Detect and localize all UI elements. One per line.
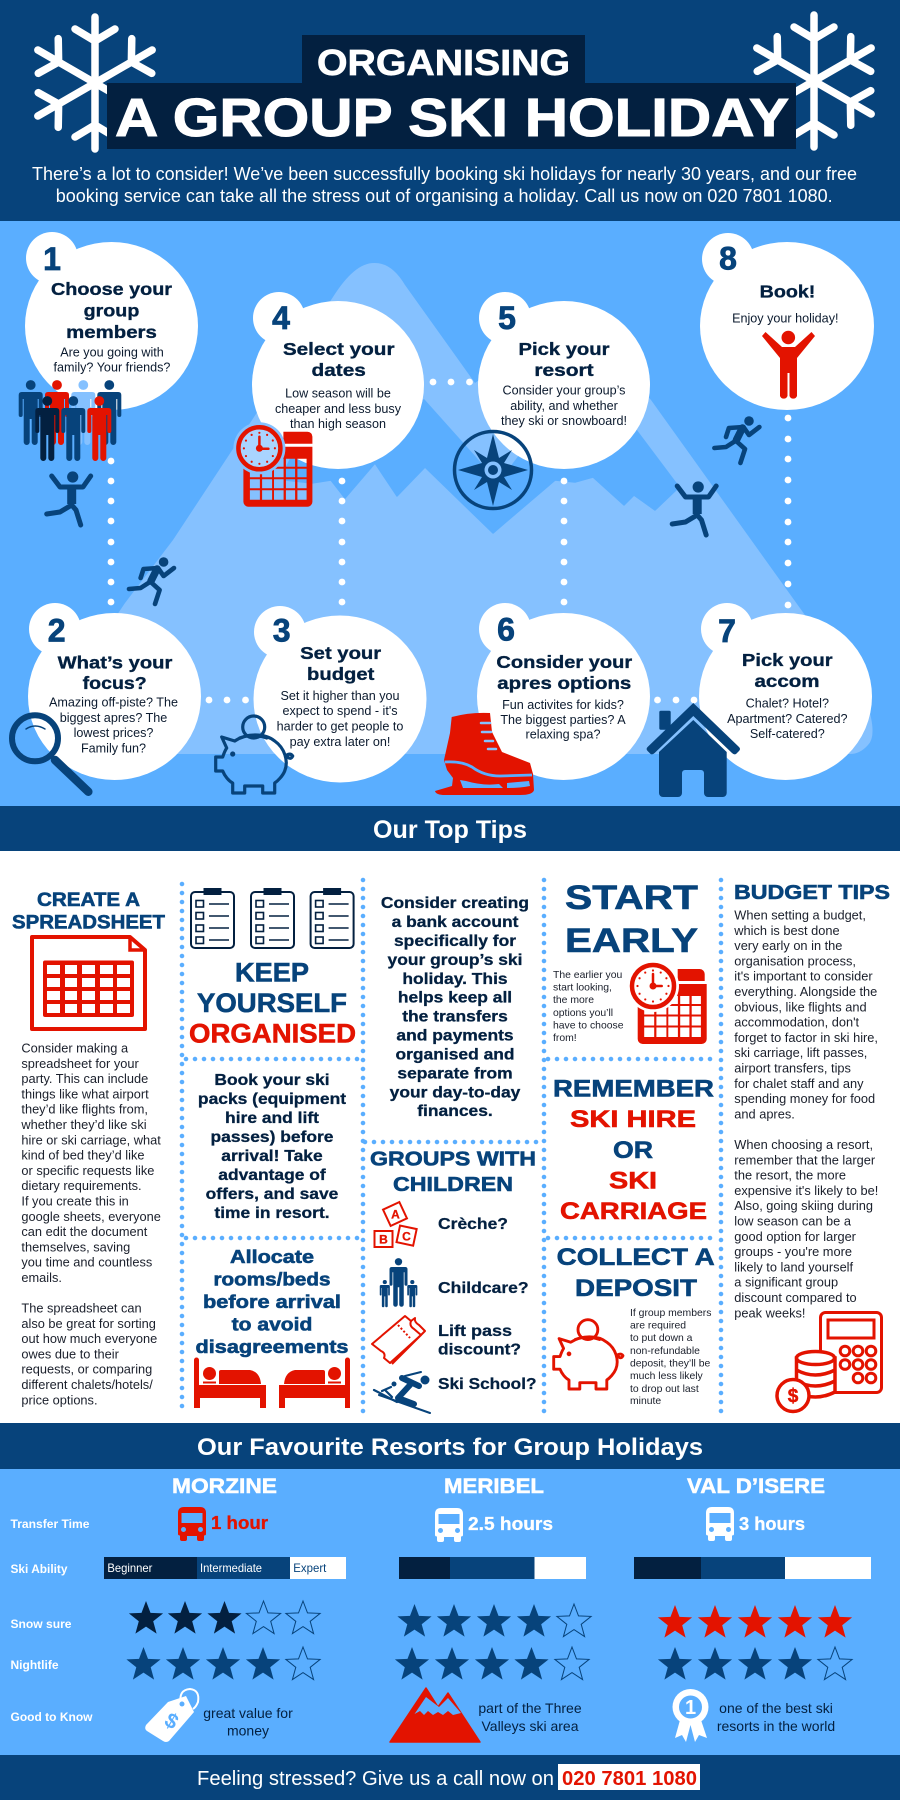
tip: collect a deposit: minute (630, 1396, 661, 1407)
intro text (32, 163, 857, 206)
step 3 bubble: pay extra later on! (290, 735, 390, 749)
tip: collect a deposit: COLLECT A (557, 1244, 715, 1271)
icon: white bus (706, 1507, 734, 1541)
step 8 bubble: 8 (719, 240, 737, 276)
step 4 bubble: dates (312, 360, 366, 380)
icon: red mountain (390, 1688, 480, 1742)
step 4 bubble: Select your (283, 339, 395, 359)
column: Val d'Isere: VAL D’ISERE (687, 1475, 825, 1498)
step 2 bubble: Family fun? (81, 742, 146, 756)
icon: price tag (145, 1689, 198, 1742)
step 1 bubble: Choose your (51, 279, 172, 299)
tip: book ski packs: advantage of (218, 1166, 326, 1184)
tip: budget tips: very early on in the (734, 938, 842, 953)
tip: budget tips (733, 882, 890, 1412)
tip: budget tips: airport transfers, tips (734, 1060, 851, 1076)
icon: white bus (435, 1508, 463, 1542)
step 6 bubble: The biggest parties? A (500, 713, 626, 727)
icon: alphabet blocks: C (402, 1230, 411, 1244)
tip: create a spreadsheet: CREATE A (37, 889, 140, 911)
step 4 bubble: cheaper and less busy (275, 402, 402, 416)
step 6 bubble: 6 (497, 612, 515, 648)
icon: magnifying glass (12, 715, 88, 792)
column: Meribel: part of the Three (478, 1700, 582, 1716)
snow sure stars (129, 1601, 320, 1634)
icon: compass (454, 432, 532, 508)
icon: skiers (374, 1372, 430, 1413)
icon: clipboards (191, 888, 354, 948)
tip: budget tips: BUDGET TIPS (734, 882, 890, 904)
step 3 bubble: budget (307, 664, 375, 684)
step 3 bubble: expect to spend - it's (282, 704, 398, 718)
step 2 bubble: focus? (83, 673, 147, 693)
header panel (0, 0, 900, 221)
icon: coins (777, 1352, 835, 1412)
icon: group of people (19, 380, 121, 461)
step 7 bubble: accom (754, 671, 820, 691)
row labels: Ski Ability (10, 1562, 68, 1576)
tip: collect a deposit: much less likely (630, 1371, 704, 1382)
spreadsheet text: google sheets, everyone (21, 1209, 161, 1224)
step 3 bubble (254, 606, 426, 782)
section heading: favourite resorts: Our Favourite Resorts for Group Holidays (197, 1434, 703, 1461)
spreadsheet text: things like what airport (21, 1086, 149, 1101)
step 7 bubble: 7 (718, 613, 736, 649)
tip: start early: the more (553, 995, 594, 1006)
step 7 bubble: Apartment? Catered? (727, 712, 848, 726)
tip: budget tips: accommodation, don't (734, 1015, 860, 1030)
tip: start early: The earlier you (553, 970, 623, 981)
spreadsheet text: different chalets/hotels/ (21, 1377, 153, 1392)
step 7 bubble: Pick your (742, 650, 833, 670)
tip: keep yourself organised: KEEP (235, 958, 309, 988)
step 2 bubble: Amazing off-piste? The (49, 696, 178, 710)
spreadsheet text: they’d like flights from, (21, 1102, 148, 1117)
intro text: booking service can take all the stress out of organising a holiday. Call us now on 020 7801 1080. (56, 185, 833, 206)
spreadsheet text: whether they’d like ski (20, 1117, 147, 1132)
tip: collect a deposit: are required (630, 1320, 686, 1332)
tip: keep yourself organised (189, 888, 356, 1049)
spreadsheet text: price options. (21, 1392, 98, 1407)
tip: bank account: organised and (395, 1045, 515, 1063)
tip: book ski packs (198, 1071, 347, 1222)
step 1 bubble: Are you going with (60, 346, 164, 360)
panel: top tips (0, 851, 900, 1423)
nightlife stars (395, 1647, 589, 1680)
step 5 bubble: resort (534, 360, 594, 380)
tip: budget tips: which is best done (733, 923, 840, 938)
spreadsheet text: you time and countless (21, 1255, 152, 1270)
tip: collect a deposit (554, 1244, 715, 1407)
spreadsheet text: out how much everyone (21, 1331, 157, 1346)
spreadsheet text: The spreadsheet can (21, 1300, 142, 1316)
tip: start early: start looking, (553, 983, 612, 994)
column: Morzine: MORZINE (172, 1475, 277, 1498)
icon: alphabet blocks: B (379, 1232, 388, 1246)
icon: red bus (178, 1507, 206, 1541)
column: Meribel: 2.5 hours (468, 1514, 553, 1534)
tip: budget tips: likely to land yourself (734, 1259, 854, 1274)
tip: start early: from! (553, 1033, 577, 1044)
tip: start early: have to choose (553, 1020, 624, 1032)
nightlife stars (658, 1647, 852, 1680)
tip: remember ski hire or carriage (553, 1076, 714, 1225)
step 8 bubble: Enjoy your holiday! (732, 311, 839, 325)
icon: house (647, 703, 740, 797)
tip: budget tips: everything. Alongside the (734, 984, 877, 999)
spreadsheet text: emails. (21, 1270, 62, 1285)
column: Val d'Isere: resorts in the world (717, 1718, 835, 1734)
icon: rosette: 1 (685, 1697, 696, 1719)
step 6 bubble (477, 603, 650, 780)
step 5 bubble: Consider your group’s (503, 383, 625, 397)
tip: allocate rooms (194, 1246, 350, 1408)
icon: jumping figure right (672, 481, 716, 535)
icon: alphabet blocks (374, 1202, 417, 1247)
icon: snowflake right (747, 15, 881, 147)
title (107, 35, 796, 149)
tip: collect a deposit: DEPOSIT (575, 1275, 697, 1302)
tip: budget tips: ski carriage, lift passes, (734, 1045, 867, 1060)
spreadsheet text: kind of bed they’d like (21, 1148, 144, 1163)
ski ability bar: Intermediate (200, 1561, 262, 1575)
tip: keep yourself organised: YOURSELF (197, 988, 347, 1018)
icon: snowflake left (28, 17, 162, 149)
tip: bank account: specifically for (394, 932, 517, 950)
tip: collect a deposit: to drop out last (630, 1384, 699, 1395)
tip: book ski packs: Book your ski (214, 1071, 330, 1089)
tip: bank account: separate from (397, 1064, 513, 1082)
spreadsheet text: dietary requirements. (21, 1178, 142, 1193)
row labels (10, 1517, 93, 1724)
mountains backdrop (50, 263, 873, 754)
title: A GROUP SKI HOLIDAY (115, 88, 789, 148)
step 7 bubble: Chalet? Hotel? (746, 697, 829, 711)
tip: groups with children: discount? (438, 1342, 521, 1359)
icon: piggy bank red (554, 1320, 623, 1389)
tip: budget tips: the resort, the more (734, 1168, 846, 1183)
tip: bank account: your day-to-day (390, 1083, 521, 1101)
spreadsheet text: or specific requests like (21, 1163, 154, 1178)
footer call to action: Feeling stressed? Give us a call now on (197, 1768, 554, 1790)
step 6 bubble: Consider your (496, 652, 632, 672)
tip: groups with children: Childcare? (438, 1280, 529, 1297)
tip: bank account: and payments (396, 1026, 514, 1044)
ski ability bar (104, 1557, 346, 1579)
icon: price tag: $ (160, 1708, 182, 1734)
tip: groups with children: Ski School? (438, 1376, 536, 1393)
icon: piggy bank blue (216, 716, 293, 793)
step 4 bubble (252, 292, 424, 469)
spreadsheet text: party. This can include (21, 1071, 148, 1086)
icon: lift tickets (372, 1316, 425, 1364)
intro text: There’s a lot to consider! We’ve been successfully booking ski holidays for nearly 30 years, and our free (32, 163, 857, 184)
snow sure stars (397, 1604, 591, 1637)
icon: beds (194, 1358, 350, 1408)
tip: budget tips: peak weeks! (734, 1305, 805, 1320)
ski ability bar (399, 1557, 586, 1579)
spreadsheet text: Consider making a (21, 1040, 129, 1056)
ski ability bar: Expert (293, 1561, 327, 1575)
column: Morzine: money (227, 1722, 269, 1738)
icon: coins: $ (788, 1386, 799, 1407)
tip: groups with children: CHILDREN (393, 1173, 513, 1196)
step 3 bubble: harder to get people to (277, 720, 403, 734)
tip: bank account (381, 894, 529, 1120)
step 4 bubble: Low season will be (285, 387, 391, 401)
step 5 bubble (478, 292, 650, 469)
tip: book ski packs: offers, and save (206, 1185, 338, 1203)
tip: budget tips: low season can be a (734, 1214, 852, 1228)
column: Meribel: MERIBEL (444, 1475, 544, 1498)
tip: allocate rooms: Allocate (230, 1246, 314, 1267)
step 5 bubble: ability, and whether (510, 399, 618, 413)
spreadsheet text: hire or ski carriage, what (21, 1132, 161, 1147)
tip: start early: options you’ll (553, 1008, 613, 1019)
tip: groups with children (370, 1148, 536, 1413)
spreadsheet text: owes due to their (21, 1346, 120, 1361)
tip: collect a deposit: deposit, they’ll be (630, 1358, 711, 1369)
tip: allocate rooms: disagreements (196, 1336, 348, 1357)
spreadsheet text (20, 1040, 161, 1407)
step 7 bubble (699, 603, 872, 780)
step 4 bubble: than high season (290, 417, 386, 431)
tip: groups with children: Lift pass (438, 1323, 512, 1340)
icon: calendar with clock (233, 422, 312, 507)
tip: book ski packs: packs (equipment (198, 1090, 347, 1108)
step 5 bubble: they ski or snowboard! (501, 414, 627, 428)
tip: remember ski hire or carriage: SKI (609, 1168, 657, 1194)
footer call to action (0, 1755, 900, 1800)
tip: groups with children: GROUPS WITH (370, 1148, 536, 1171)
step 3 bubble: Set your (300, 643, 381, 663)
tip: book ski packs: passes) before (211, 1128, 333, 1146)
column: Morzine: 1 hour (211, 1513, 268, 1533)
column: Morzine: great value for (203, 1705, 293, 1721)
tip: budget tips: Also, going skiing during (734, 1198, 873, 1213)
step 7 bubble: Self-catered? (750, 727, 825, 741)
step 1 bubble: 1 (43, 241, 61, 277)
step 1 bubble (25, 232, 198, 410)
step 1 bubble: group (84, 300, 139, 320)
tip: start early: START (565, 879, 698, 917)
tip: budget tips: discount compared to (734, 1290, 857, 1305)
tip: budget tips: and apres. (734, 1106, 795, 1121)
ski ability bar (634, 1557, 871, 1579)
column: Val d'Isere (634, 1475, 871, 1742)
step 4 bubble: 4 (272, 300, 290, 336)
step 3 bubble: 3 (273, 613, 291, 649)
tip: budget tips: forget to factor in ski hire, (734, 1030, 878, 1045)
tip: book ski packs: hire and lift (225, 1109, 319, 1127)
tip: budget tips: obvious, like flights and (734, 999, 867, 1014)
step 2 bubble: lowest prices? (74, 726, 153, 740)
column: Val d'Isere: one of the best ski (719, 1700, 833, 1716)
ski ability bar: Beginner (107, 1561, 152, 1575)
tip: budget tips: spending money for food (734, 1091, 875, 1106)
tip: budget tips: good option for larger (734, 1229, 857, 1244)
tip: allocate rooms: rooms/beds (214, 1269, 330, 1290)
spreadsheet text: If you create this in (21, 1194, 129, 1208)
tip: remember ski hire or carriage: SKI HIRE (570, 1106, 696, 1133)
icon: rosette (672, 1689, 708, 1742)
tip: book ski packs: arrival! Take (221, 1147, 323, 1165)
tip: budget tips: it's important to consider (734, 969, 873, 984)
tip: bank account: finances. (417, 1102, 493, 1120)
tip: allocate rooms: before arrival (203, 1291, 341, 1312)
tip: create a spreadsheet: SPREADSHEET (12, 912, 165, 934)
tip: allocate rooms: to avoid (232, 1314, 312, 1335)
step 2 bubble (28, 603, 201, 780)
step 2 bubble: 2 (48, 613, 66, 649)
spreadsheet text: requests, or comparing (21, 1362, 152, 1377)
icon: spreadsheet (32, 937, 145, 1029)
column: Morzine (104, 1475, 346, 1742)
step 8 bubble (700, 233, 874, 410)
tip: bank account: Consider creating (381, 894, 529, 912)
step 1 bubble: family? Your friends? (54, 361, 170, 375)
row labels: Snow sure (10, 1617, 72, 1631)
tip: remember ski hire or carriage: REMEMBER (553, 1076, 714, 1102)
spreadsheet text: themselves, saving (21, 1239, 130, 1254)
snow sure stars (658, 1605, 852, 1638)
column: Meribel (390, 1475, 591, 1742)
step 2 bubble: biggest apres? The (60, 711, 167, 725)
row labels: Nightlife (10, 1658, 59, 1672)
tip: budget tips: groups - you're more (734, 1244, 852, 1259)
icon: calendar with clock white (627, 960, 707, 1044)
panel: resorts comparison (0, 1469, 900, 1755)
icon: celebrating person (762, 331, 815, 399)
step 1 bubble: members (66, 322, 157, 342)
step 5 bubble: Pick your (518, 339, 610, 359)
tip: budget tips: for chalet staff and any (734, 1076, 864, 1091)
tip: budget tips: organisation process, (734, 953, 856, 968)
tip: groups with children: Crèche? (438, 1216, 508, 1233)
icon: running figure (129, 557, 174, 604)
section heading: our top tips (0, 806, 900, 851)
section heading: our top tips: Our Top Tips (373, 816, 527, 844)
icon: ice skate (435, 713, 534, 795)
tip: remember ski hire or carriage: OR (613, 1137, 653, 1164)
icon: adult and children (380, 1258, 417, 1307)
tip: collect a deposit: If group members (630, 1308, 711, 1319)
section heading: favourite resorts (0, 1423, 900, 1469)
spreadsheet text: also be great for sorting (21, 1316, 156, 1331)
panel: eight steps (0, 221, 900, 806)
tip: bank account: your group’s ski (388, 951, 522, 969)
tip: keep yourself organised: ORGANISED (189, 1019, 356, 1049)
tip: collect a deposit: non-refundable (630, 1346, 700, 1357)
step 6 bubble: Fun activites for kids? (502, 698, 624, 712)
tip: budget tips: a significant group (734, 1275, 838, 1290)
step 2 bubble: What’s your (58, 652, 173, 672)
column: Val d'Isere: 3 hours (739, 1514, 805, 1534)
footer call to action: 020 7801 1080 (562, 1768, 697, 1790)
column: Meribel: Valleys ski area (481, 1718, 579, 1734)
tip: budget tips: When setting a budget, (734, 908, 866, 922)
step 3 bubble: Set it higher than you (280, 689, 400, 703)
row labels: Good to Know (10, 1710, 93, 1724)
tip: bank account: the transfers (402, 1007, 508, 1025)
tip: budget tips: expensive it's likely to be! (734, 1183, 878, 1198)
tip: start early: EARLY (565, 922, 698, 960)
tip: remember ski hire or carriage: CARRIAGE (560, 1198, 707, 1225)
step 5 bubble: 5 (498, 300, 516, 336)
icon: alphabet blocks: A (391, 1208, 400, 1222)
tip: create a spreadsheet (12, 889, 165, 1407)
icon: calculator (820, 1312, 882, 1392)
step 6 bubble: apres options (497, 673, 632, 693)
spreadsheet text: can edit the document (21, 1224, 148, 1239)
tip: bank account: holiday. This (402, 969, 508, 988)
row labels: Transfer Time (10, 1517, 90, 1531)
tip: budget tips: remember that the larger (734, 1152, 876, 1167)
tip: bank account: helps keep all (398, 988, 512, 1007)
spreadsheet text: spreadsheet for your (21, 1056, 140, 1071)
title: ORGANISING (317, 42, 570, 83)
tip: book ski packs: time in resort. (214, 1204, 330, 1222)
step 8 bubble: Book! (760, 282, 815, 302)
nightlife stars (126, 1647, 320, 1680)
tip: budget tips: When choosing a resort, (734, 1137, 873, 1152)
icon: jumping figure (47, 471, 91, 525)
step 6 bubble: relaxing spa? (526, 728, 600, 742)
tip: bank account: a bank account (392, 913, 519, 931)
tip: start early (553, 879, 707, 1044)
tip: collect a deposit: to put down a (630, 1333, 693, 1344)
icon: running figure right (714, 416, 759, 463)
